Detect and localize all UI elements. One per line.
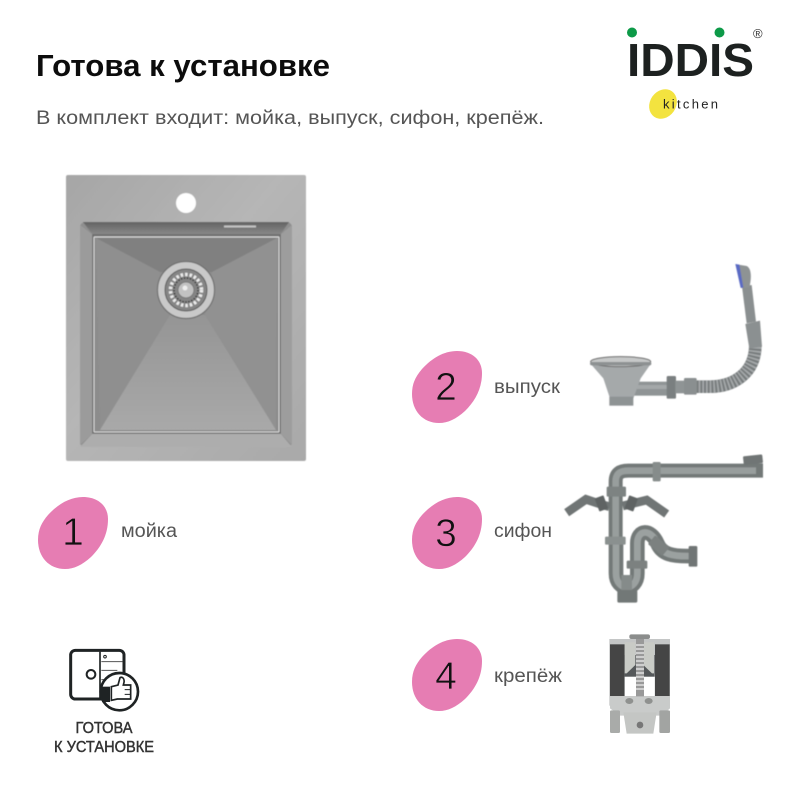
logo: IDDIS kitchen: IDDIS xyxy=(627,34,754,86)
badge 3: 3 xyxy=(435,512,457,555)
label: выпуск: выпуск xyxy=(494,377,561,398)
drain xyxy=(158,262,214,318)
badge 1 xyxy=(38,497,108,569)
label: сифон: сифон xyxy=(494,521,552,542)
photo: siphon xyxy=(567,454,763,603)
subtitle: contents of the kit: В комплект входит: мойка, выпуск, сифон, крепёж. xyxy=(36,107,544,129)
sink photo xyxy=(66,175,306,461)
logo: IDDIS kitchen xyxy=(627,26,763,124)
icon caption: ГОТОВА xyxy=(76,720,133,737)
logo: IDDIS kitchen: kitchen xyxy=(663,96,718,112)
photo: mounting clip xyxy=(609,634,670,734)
label: крепёж: крепёж xyxy=(494,666,562,687)
badge 2: 2 xyxy=(435,366,457,409)
logo: IDDIS kitchen: ® xyxy=(753,26,763,41)
label: мойка: мойка xyxy=(121,521,177,542)
tap hole xyxy=(176,193,196,213)
badge 4: 4 xyxy=(435,655,457,698)
badge 2 xyxy=(412,351,482,423)
badge 3 xyxy=(412,497,482,569)
title: Готова к установке xyxy=(36,48,330,83)
badge 4 xyxy=(412,639,482,711)
bowl floor xyxy=(93,235,280,433)
icon caption: К УСТАНОВКЕ xyxy=(54,739,154,756)
badge 1: 1 xyxy=(62,511,84,554)
photo: outlet with overflow xyxy=(590,264,762,406)
icon: ready to install xyxy=(71,650,138,710)
icon caption xyxy=(54,720,154,756)
